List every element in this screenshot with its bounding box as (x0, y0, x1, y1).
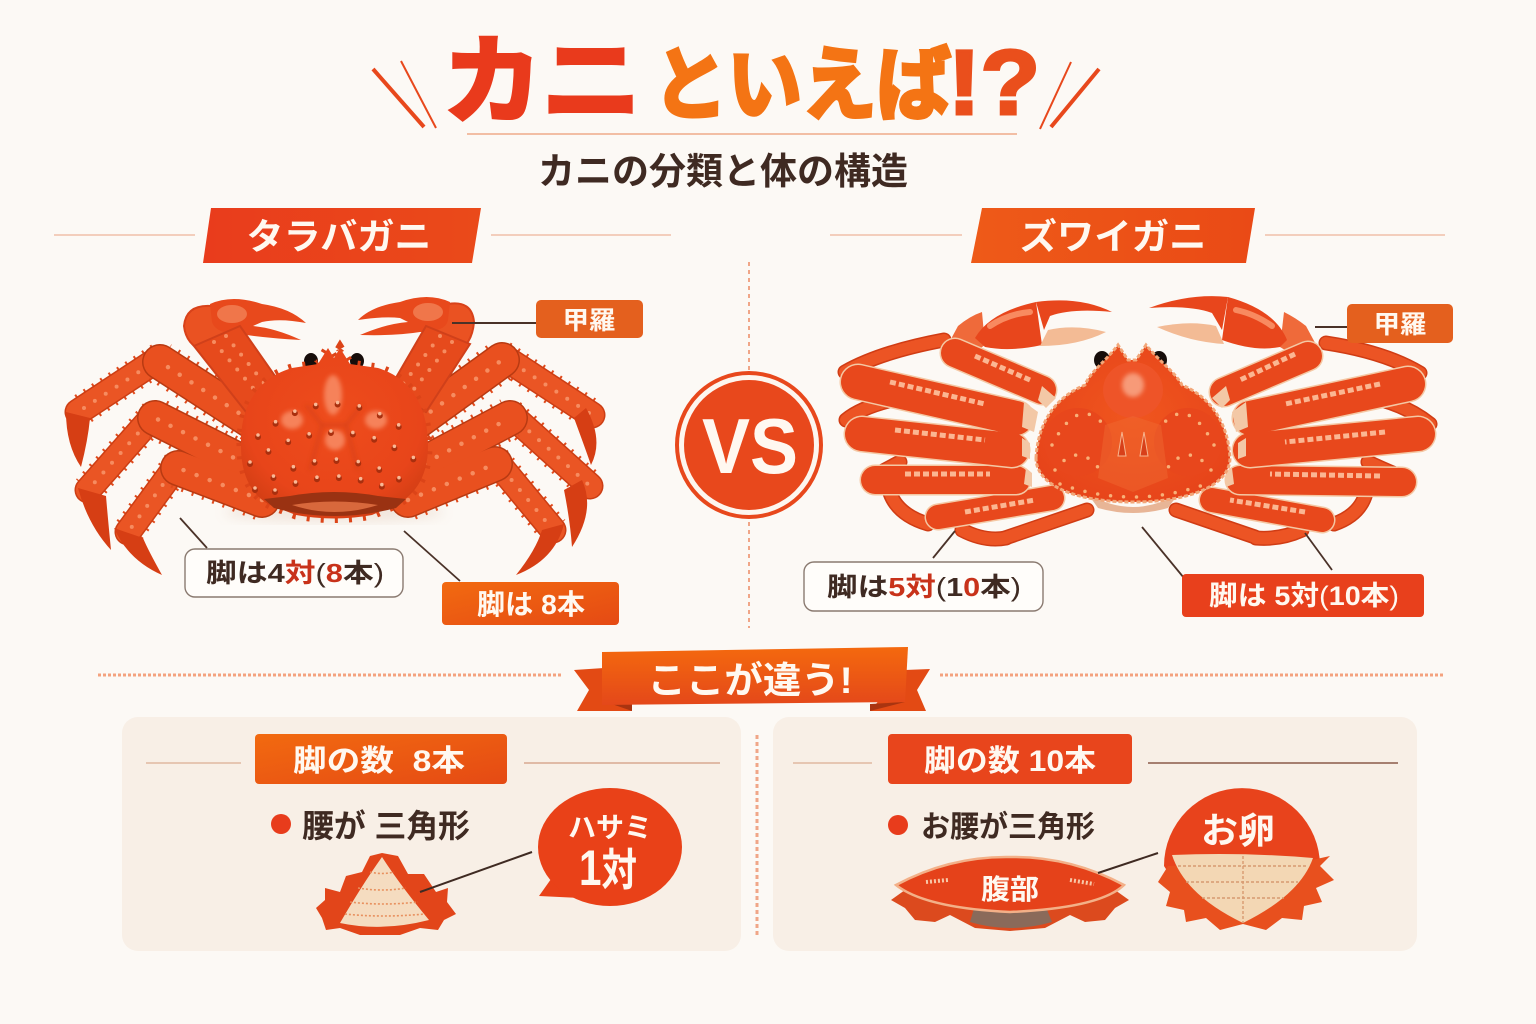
king crab eyes (304, 353, 364, 369)
label: king crab legs count outline: 脚は4 対(8本) (206, 558, 384, 588)
title accent strokes right (1040, 62, 1099, 129)
snow crab thin leg segments (845, 340, 1430, 539)
label: king crab legs count filled (404, 531, 619, 625)
illustration: king crab (taraba gani) (66, 297, 596, 575)
title accent strokes left (373, 61, 436, 128)
label: king crab legs count outline (180, 518, 403, 597)
subtitle: カニの分類と体の構造 (538, 151, 908, 192)
king crab spines (250, 402, 420, 492)
speech bubble: one pair of claws (538, 788, 682, 906)
snow crab claws (944, 296, 1320, 355)
panel: taraba gani difference (122, 717, 741, 951)
heading: zuwai gani: ズワイガニ (1020, 216, 1206, 257)
king crab leg tips (66, 408, 596, 575)
panel heading: 8 legs (255, 734, 507, 784)
title (373, 29, 1099, 136)
banner: koko ga chigau: ここが違う! (648, 660, 852, 701)
label: carapace left (452, 300, 643, 338)
banner: koko ga chigau (574, 647, 930, 711)
title text: to ieba: といえば (653, 41, 951, 130)
bullet text: triangular abdomen: 腰が 三角形 (302, 808, 470, 844)
label: king crab legs count filled: 脚は 8本 (477, 589, 585, 620)
panel heading: 10 legs (888, 734, 1132, 784)
panel: zuwai gani difference (773, 717, 1417, 951)
panel heading: 8 legs: 脚の数 8本 (293, 745, 465, 778)
VS badge (677, 373, 821, 517)
speech bubble: one pair of claws: 1対 (579, 840, 637, 896)
king crab soft shadow (224, 502, 444, 522)
bullet text: triangular abdomen: お腰が三角形 (921, 810, 1095, 844)
label: snow crab legs count outline (804, 531, 1043, 611)
heading: taraba gani (203, 208, 481, 263)
snow crab main legs (858, 353, 1418, 520)
label: snow crab legs count outline: 脚は 5対 (10本) (827, 572, 1021, 602)
title text: exclamation: !? (948, 32, 1040, 134)
circle badge: eggs with abdomen: お卵 (1201, 810, 1275, 851)
heading: zuwai gani (971, 208, 1255, 263)
king crab walking legs (78, 356, 592, 532)
snow crab eyes (1094, 351, 1167, 369)
mini crab: triangular abdomen (316, 853, 456, 935)
illustration: snow crab (zuwai gani) (845, 296, 1430, 539)
snow crab carapace (1036, 345, 1230, 502)
king crab claws (184, 297, 474, 412)
label: carapace right (1315, 304, 1453, 343)
mini crab: side view with abdomen label: 腹部 (981, 874, 1039, 905)
circle badge: eggs with abdomen (1158, 788, 1334, 930)
label: carapace left: 甲羅 (562, 307, 616, 335)
speech bubble: one pair of claws: ハサミ (568, 812, 652, 843)
king crab carapace (241, 348, 428, 518)
label: snow crab legs count filled (1142, 527, 1424, 617)
VS badge: VS (702, 402, 798, 490)
title text: kani: カニ (443, 29, 641, 136)
panel heading: 10 legs: 脚の数 10本 (924, 745, 1096, 778)
heading: taraba gani: タラバガニ (246, 216, 432, 257)
label: carapace right: 甲羅 (1374, 311, 1426, 339)
snow crab underside (1088, 494, 1178, 513)
label: snow crab legs count filled: 脚は 5対(10本) (1209, 581, 1399, 611)
mini crab: side view with abdomen label (891, 857, 1129, 931)
snow crab joints (1022, 386, 1248, 487)
